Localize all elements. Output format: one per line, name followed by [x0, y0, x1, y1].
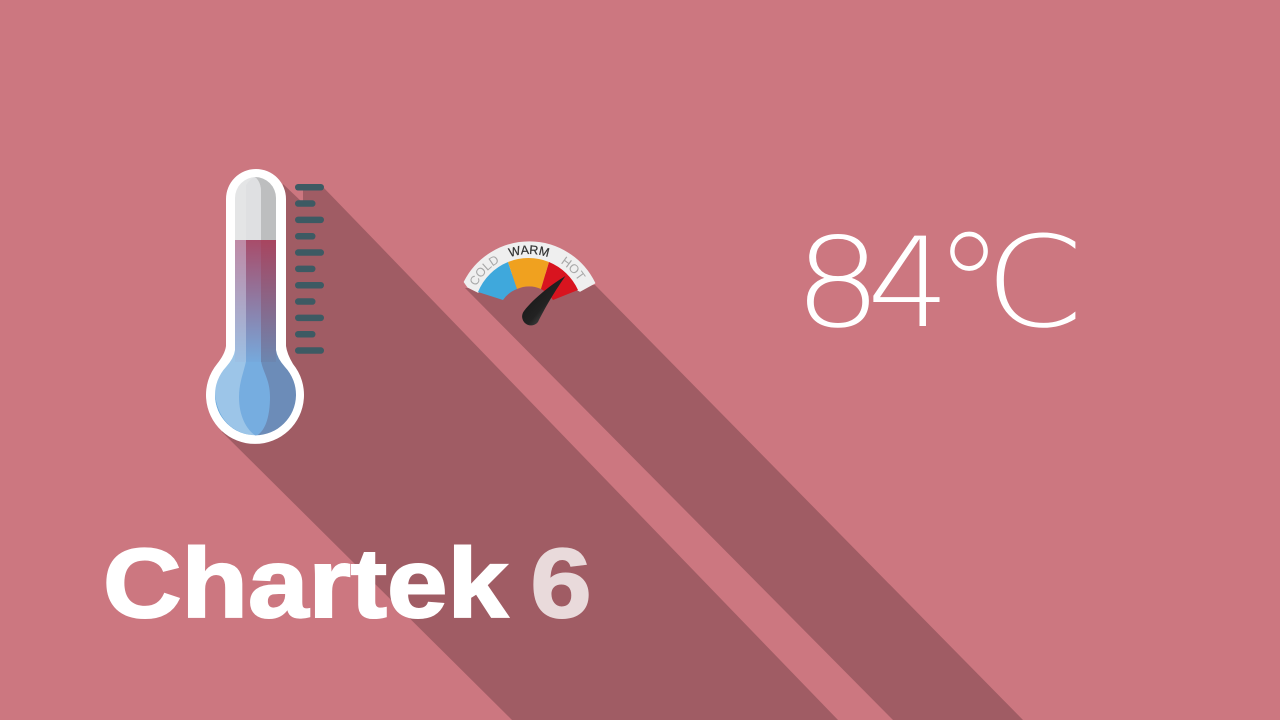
thermometer scale ticks: [295, 184, 324, 354]
long shadow: gauge: [465, 285, 1023, 720]
digit 8: 8: [794, 212, 882, 356]
thermometer bulb: [215, 350, 296, 436]
gauge white band: [464, 242, 594, 292]
gauge label cold: COLD: [470, 256, 498, 284]
infographic canvas: [106, 169, 1076, 720]
title: [103, 528, 592, 638]
gauge cold segment: [478, 262, 517, 300]
gauge hot segment: [541, 262, 578, 300]
thermometer white casing: [206, 169, 304, 444]
gauge label warm: WARM: [508, 245, 550, 257]
icon: thermometer: [206, 169, 324, 445]
letter C: C: [985, 209, 1083, 356]
long shadow: thermometer: [222, 184, 838, 720]
title version number: 6: [530, 528, 592, 638]
degree sign: °: [933, 201, 1005, 375]
gauge warm segment: [508, 258, 549, 289]
gauge needle: [522, 276, 566, 325]
temperature reading: [794, 201, 1083, 375]
title word: Chartek: [103, 528, 509, 638]
digit 4: 4: [867, 212, 950, 356]
thermometer fluid column: [235, 240, 276, 362]
icon: temperature gauge: [464, 241, 596, 326]
gauge label hot: HOT: [561, 256, 586, 279]
thermometer empty glass: [235, 177, 276, 240]
